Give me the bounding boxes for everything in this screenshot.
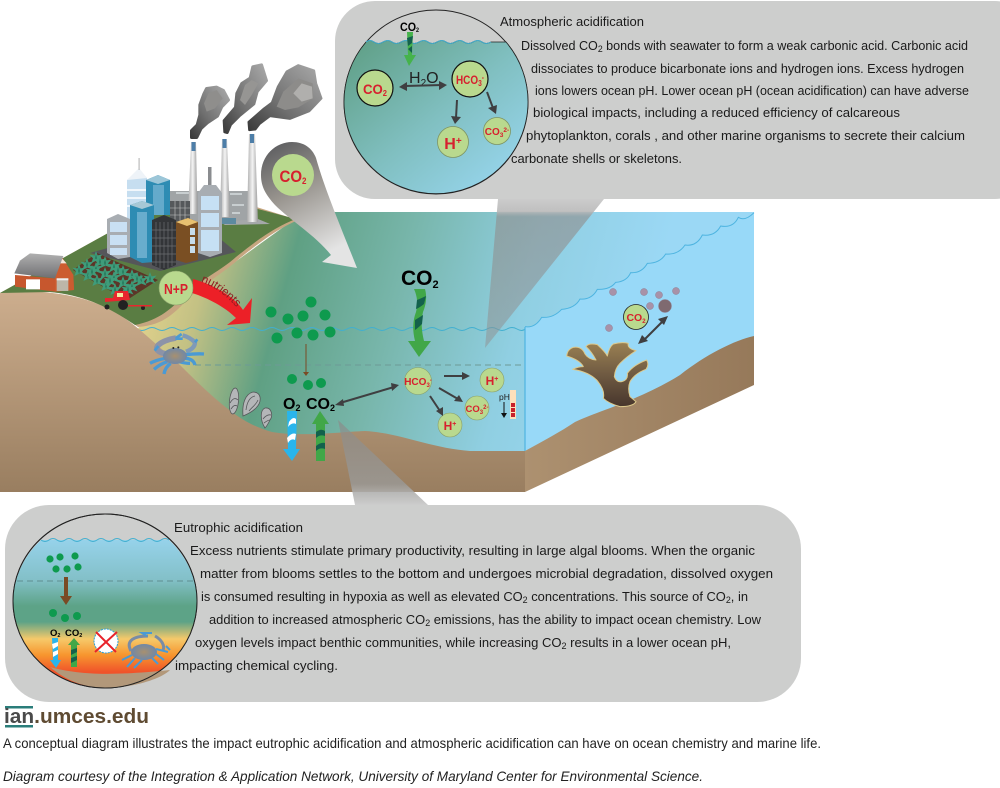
inset circle: carbonate chemistry: H xyxy=(444,136,456,153)
hillside land xyxy=(0,200,298,327)
pH gauge xyxy=(499,390,516,419)
text: eutrophic acidification: is consumed resulting in hypoxia as well as elevated CO xyxy=(201,589,525,604)
text: atmospheric acidification: biological impacts, including a reduced efficiency of calcareous xyxy=(533,105,901,120)
atmospheric callout pointer xyxy=(485,199,604,348)
carbon dioxide and oxygen labels xyxy=(283,396,335,413)
inset circle: carbonate chemistry: CO xyxy=(363,81,384,97)
text: eutrophic acidification: 2 xyxy=(425,618,430,628)
inset circle: carbonate chemistry: O xyxy=(426,70,439,87)
CO2 teardrop pointer: CO xyxy=(280,167,305,186)
eutrophic callout pointer xyxy=(338,420,428,505)
coral xyxy=(567,343,648,407)
calcifying plankton particles xyxy=(606,288,680,332)
inset circle: carbonate chemistry: 2 xyxy=(416,28,420,34)
inset circle: carbonate chemistry: 3 xyxy=(478,79,482,88)
credit: Diagram courtesy of the Integration & Application Network, University of Maryland Center for Environmental Science. xyxy=(3,768,703,784)
seabed front face xyxy=(0,291,525,492)
water surface wave line xyxy=(137,328,525,330)
inset circle: carbonate chemistry: - xyxy=(482,73,484,82)
carbon dioxide and oxygen labels: O xyxy=(283,396,295,413)
text: atmospheric acidification: bonds with seawater to form a weak carbonic acid. Carbonic acid xyxy=(603,38,968,53)
CO2 teardrop pointer: 2 xyxy=(302,176,306,186)
text: eutrophic acidification: 2 xyxy=(562,641,567,651)
carbon chemistry in water xyxy=(335,368,504,437)
tractor xyxy=(104,291,152,310)
inset circle: hypoxia: 2 xyxy=(79,633,82,639)
atmospheric CO2 label: 2 xyxy=(432,279,439,291)
inset circle: carbonate chemistry: CO xyxy=(400,20,418,34)
text: atmospheric acidification: dissociates to produce bicarbonate ions and hydrogen ions. Excess hydrogen xyxy=(531,61,964,76)
logo: ian.umces.edu: ian.umces.edu xyxy=(4,706,149,728)
carbon chemistry in water: 3 xyxy=(426,383,430,389)
oxygen release arrow xyxy=(283,411,300,461)
oysters and mussels xyxy=(228,388,272,428)
carbon chemistry in water: + xyxy=(494,376,498,383)
inset circle: hypoxia: O xyxy=(50,628,57,639)
algae bloom dots xyxy=(266,296,336,344)
inset circle: carbonate chemistry: 3 xyxy=(500,132,504,139)
settled algae dots xyxy=(287,374,326,390)
text: eutrophic acidification: addition to increased atmospheric CO xyxy=(209,612,427,627)
carbon dioxide release arrow xyxy=(312,411,329,461)
crop field xyxy=(72,251,158,300)
text: eutrophic acidification: matter from blooms settles to the bottom and undergoes microbial degradation, dissolved oxygen xyxy=(200,566,773,581)
atmospheric CO2 label: CO xyxy=(401,267,432,290)
carbon chemistry in water: HCO xyxy=(404,377,426,388)
carbon chemistry in water: 3 xyxy=(480,410,484,416)
text: eutrophic acidification: results in a lower ocean pH, xyxy=(567,635,731,650)
inset circle: carbonate chemistry: 2 xyxy=(383,89,388,98)
text: eutrophic acidification: , in xyxy=(731,589,748,604)
carbon chemistry in water: H xyxy=(486,374,494,388)
text: atmospheric acidification: Atmospheric acidification xyxy=(500,14,644,29)
text: eutrophic acidification: impacting chemical cycling. xyxy=(175,658,338,673)
city xyxy=(90,158,236,271)
power plant xyxy=(170,134,270,225)
inset circle: carbonate chemistry: 2- xyxy=(503,127,509,134)
inset circle: carbonate chemistry: H xyxy=(409,70,421,87)
text: eutrophic acidification: 2 xyxy=(726,595,731,605)
carbon chemistry in water: CO xyxy=(466,404,480,415)
text: eutrophic acidification: emissions, has the ability to impact ocean chemistry. Low xyxy=(430,612,762,627)
text: atmospheric acidification: 2 xyxy=(598,44,603,54)
coral CO2 circle and arrow: CO xyxy=(626,312,642,324)
text: atmospheric acidification: Dissolved CO xyxy=(521,38,600,53)
text: eutrophic acidification: Excess nutrients stimulate primary productivity, resulting in large algal blooms. When the organic xyxy=(190,543,756,558)
inset circle: carbonate chemistry: CO xyxy=(485,127,500,138)
open ocean blue water xyxy=(525,213,754,467)
inset circle: hypoxia: 2 xyxy=(57,633,60,639)
text: eutrophic acidification: 2 xyxy=(523,595,528,605)
settling arrow xyxy=(303,344,309,376)
pH gauge: pH xyxy=(499,392,510,402)
N+P circle xyxy=(159,271,193,305)
text: eutrophic acidification: oxygen levels impact benthic communities, while increasing CO xyxy=(195,635,561,650)
inset circle: hypoxia: CO xyxy=(65,628,79,639)
inset circle: carbonate chemistry: + xyxy=(456,136,462,147)
coral CO2 circle and arrow: 2 xyxy=(642,319,646,325)
text: atmospheric acidification: carbonate shells or skeletons. xyxy=(511,151,682,166)
text: atmospheric acidification xyxy=(500,14,969,166)
N+P circle: N+P xyxy=(164,281,188,298)
nutrients arrow xyxy=(192,276,252,325)
coral CO2 circle and arrow xyxy=(624,304,668,344)
carbon chemistry in water: + xyxy=(452,421,456,428)
carbon chemistry in water: H xyxy=(444,419,452,433)
panel: atmospheric acidification xyxy=(335,1,1000,199)
inset circle: carbonate chemistry: 2 xyxy=(421,78,427,89)
carbon dioxide and oxygen labels: CO xyxy=(306,396,330,413)
nutrients arrow: nutrients xyxy=(202,276,240,306)
carbon chemistry in water: - xyxy=(430,378,432,384)
text: eutrophic acidification: Eutrophic acidification xyxy=(174,520,303,535)
carbon chemistry in water: 2- xyxy=(483,405,488,411)
text: eutrophic acidification: concentrations. This source of CO xyxy=(528,589,726,604)
inset circle: hypoxia xyxy=(13,514,197,688)
crab xyxy=(150,334,204,374)
inset circle: carbonate chemistry xyxy=(344,10,528,194)
inset circle: carbonate chemistry: HCO xyxy=(456,73,483,87)
barn xyxy=(14,253,74,292)
panel: eutrophic acidification xyxy=(5,505,801,702)
carbon dioxide and oxygen labels: 2 xyxy=(295,403,300,413)
caption: A conceptual diagram illustrates the impact eutrophic acidification and atmospheric acidification can have on ocean chemistry and marine life. xyxy=(3,735,821,751)
water body xyxy=(138,212,754,470)
atmospheric CO2 wavy arrow xyxy=(408,289,431,357)
CO2 teardrop pointer xyxy=(261,142,357,268)
text: atmospheric acidification: ions lowers ocean pH. Lower ocean pH (ocean acidification) can have adverse xyxy=(535,83,969,98)
seabed right side xyxy=(525,336,754,492)
text: atmospheric acidification: phytoplankton, corals , and other marine organisms to secrete their calcium xyxy=(526,128,965,143)
smoke plumes xyxy=(192,65,321,137)
text: eutrophic acidification xyxy=(174,520,773,673)
carbon dioxide and oxygen labels: 2 xyxy=(330,403,335,413)
